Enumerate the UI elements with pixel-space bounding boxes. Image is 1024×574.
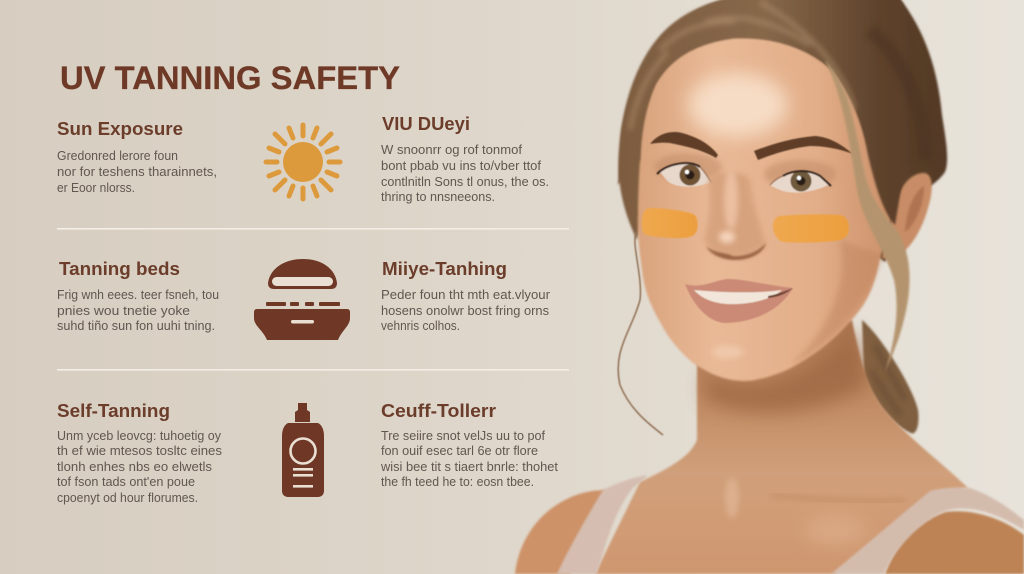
neck shadow	[705, 330, 868, 413]
text block	[57, 428, 222, 505]
left eye	[657, 163, 711, 187]
icon: sun	[266, 125, 340, 199]
collarbone shadow	[770, 495, 905, 501]
heading: Miiye-Tanhing	[382, 259, 507, 279]
text block: th ef wie mtesos tosltc eines	[57, 443, 222, 458]
text block: contlnitln Sons tl onus, the os.	[381, 174, 549, 189]
text block: cpoenyt od hour florumes.	[57, 490, 198, 505]
neck and chest	[595, 320, 968, 574]
heading: Sun Exposure	[57, 119, 183, 139]
heading: VIU DUeyi	[382, 114, 470, 134]
text block: Unm yceb leovcg: tuhoetig oy	[57, 428, 221, 443]
text block: nor for teshens tharainnets,	[57, 164, 217, 179]
text block: tof fson tads ont'en poue	[57, 474, 195, 489]
left loose strand	[618, 232, 663, 435]
text block	[381, 142, 549, 204]
dark hair shading	[870, 30, 925, 160]
text block: the fh teed he to: eosn tbee.	[381, 474, 534, 489]
icon: tanning bed	[254, 259, 350, 340]
text block: hosens onolwr bost fring orns	[381, 303, 549, 318]
text block: Gredonred lerore foun	[57, 148, 178, 163]
front lock over temple	[825, 60, 910, 372]
text block: Tre seiire snot velJs uu to pof	[381, 428, 545, 443]
heading: Self-Tanning	[57, 401, 170, 421]
right strap	[831, 488, 1024, 574]
title: UV TANNING SAFETY	[60, 60, 400, 96]
text block	[57, 148, 217, 195]
text block: fon ouif esec tarl 6e otr flore	[381, 443, 538, 458]
panel: miiye-tanhing	[381, 259, 551, 333]
collarbone highlight	[725, 478, 739, 518]
panel: tanning beds	[57, 259, 219, 333]
nose	[704, 170, 766, 260]
ear	[882, 173, 932, 259]
forehead highlight	[688, 73, 788, 137]
text block: W snoonrr og rof tonmof	[381, 142, 522, 157]
panel: self-tanning	[57, 401, 222, 505]
cheek shade	[790, 240, 882, 365]
text block: er Eoor nlorss.	[57, 180, 135, 195]
text block: pnies wou tnetie yoke	[57, 303, 190, 318]
text block	[380, 428, 558, 489]
text block: wisi bee tit s tiaert bnrle: thohet	[380, 459, 558, 474]
text block	[381, 287, 551, 333]
eye socket shading	[654, 153, 722, 181]
portrait: woman with orange cheek patches	[515, 0, 1024, 574]
panel: sun exposure	[57, 119, 217, 195]
right shoulder	[885, 511, 1024, 574]
cheek patch: right	[773, 214, 849, 243]
text block: bont pbab vu ins to/vber ttof	[381, 158, 541, 173]
face	[638, 38, 892, 381]
panel: uv duty	[381, 114, 549, 204]
heading: Tanning beds	[59, 259, 180, 279]
text block: Peder foun tht mth eat.vlyour	[381, 287, 551, 302]
mouth	[685, 279, 793, 323]
text block: Frig wnh eees. teer fsneh, tou	[57, 287, 219, 302]
text block	[57, 287, 219, 333]
ponytail	[862, 320, 919, 433]
left eyebrow	[650, 132, 718, 158]
text block: tlonh enhes nbs eo elwetls	[57, 459, 213, 474]
right eye	[770, 170, 831, 193]
icon: lotion bottle	[282, 403, 324, 497]
left strap	[557, 475, 647, 574]
back hair	[618, 0, 947, 262]
panel: ceuff-tollerr	[380, 401, 558, 489]
heading: Ceuff-Tollerr	[381, 401, 496, 421]
cheek patch: left	[642, 208, 698, 238]
hair top sweep and highlights	[618, 0, 942, 225]
chin highlight	[712, 345, 744, 359]
left shoulder	[515, 490, 606, 574]
hair light streaks	[630, 2, 855, 130]
text block: thring to nnsneeons.	[381, 189, 495, 204]
right eyebrow	[754, 136, 853, 160]
text block: suhd tiño sun fon uuhi tning.	[57, 318, 215, 333]
text block: vehnris colhos.	[381, 318, 460, 333]
